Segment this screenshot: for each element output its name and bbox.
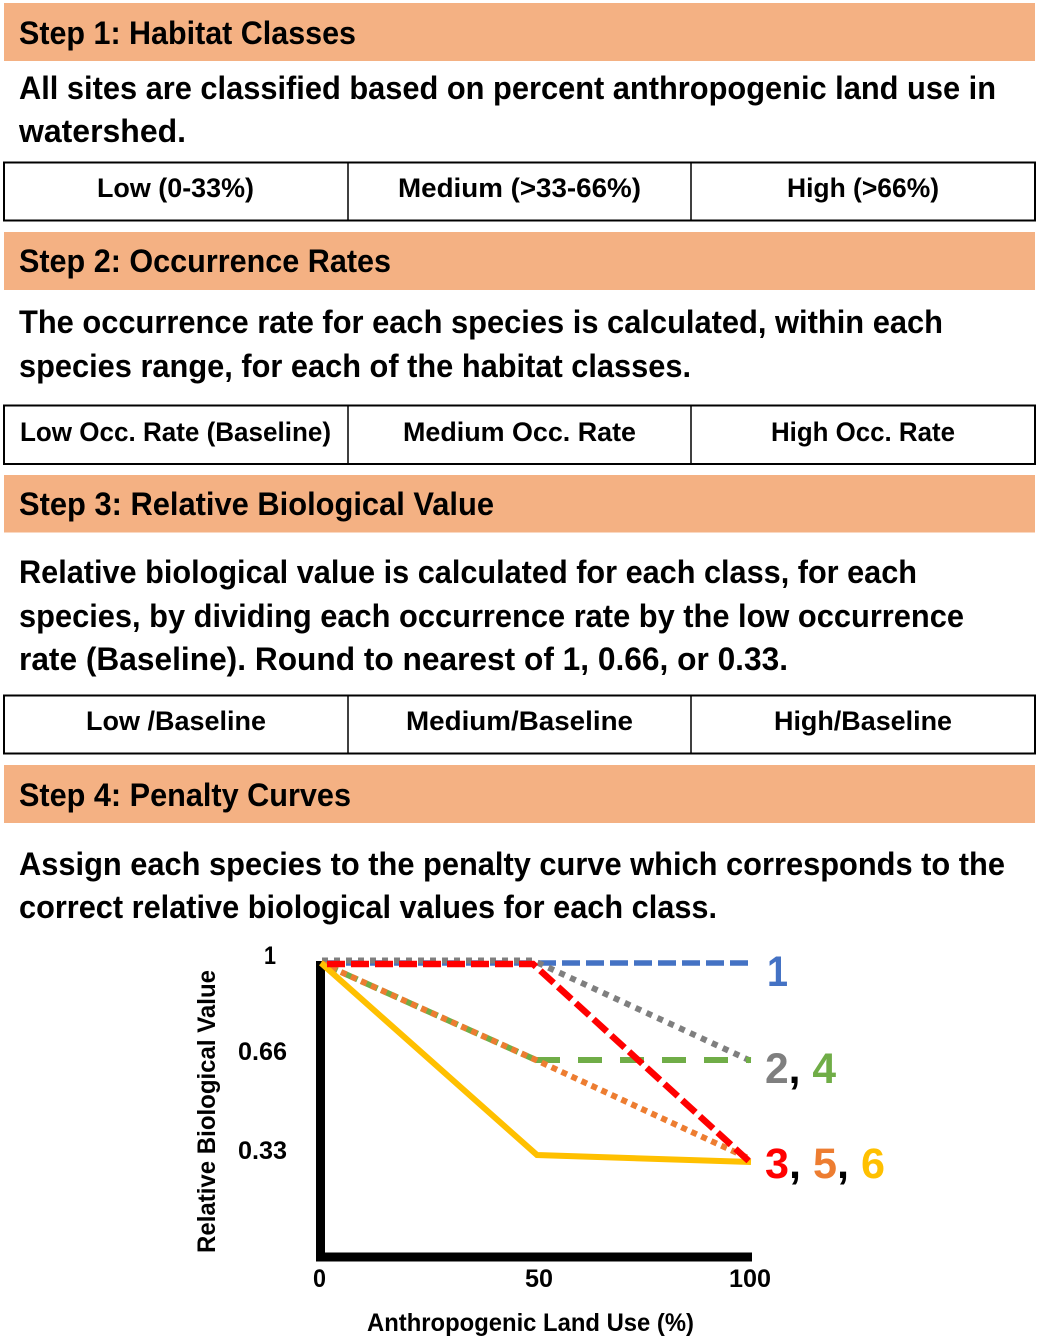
text block: step 3 description bbox=[19, 554, 964, 677]
table: occurrence rates bbox=[4, 405, 1035, 464]
y axis tick labels: 1 bbox=[264, 942, 276, 970]
curve label: 1: 1 bbox=[767, 948, 788, 996]
text block: step 3 description: rate (Baseline). Round to nearest of 1, 0.66, or 0.33. bbox=[19, 641, 788, 677]
y axis tick labels: 0.66 bbox=[238, 1038, 287, 1066]
x axis tick labels: 0 bbox=[313, 1265, 326, 1293]
table: habitat classes: High (>66%) bbox=[787, 173, 939, 203]
table: habitat classes: Low (0-33%) bbox=[97, 173, 254, 203]
y axis title: Relative Biological Value bbox=[193, 970, 221, 1253]
table: habitat classes bbox=[4, 162, 1035, 221]
text block: step 2 description: species range, for each of the habitat classes. bbox=[19, 348, 691, 384]
x axis title: Anthropogenic Land Use (%) bbox=[367, 1309, 694, 1337]
panel: step 2 header bbox=[4, 232, 1035, 290]
panel: step 3 header bbox=[4, 475, 1035, 532]
text block: step 3 description: Relative biological value is calculated for each class, for each bbox=[19, 554, 917, 590]
curve labels: 3, 5, 6: 3, 5, 6 bbox=[765, 1140, 885, 1188]
curve 1: blue dashed bbox=[322, 960, 751, 966]
table: relative biological value bbox=[4, 695, 1035, 754]
curve 6: yellow solid bbox=[321, 963, 751, 1162]
table: relative biological value: Low /Baseline bbox=[86, 706, 266, 736]
table: relative biological value: High/Baseline bbox=[774, 706, 952, 736]
y axis tick labels bbox=[238, 942, 287, 1165]
text block: step 4 description: correct relative biological values for each class. bbox=[19, 889, 717, 925]
text block: step 2 description: The occurrence rate for each species is calculated, within each bbox=[19, 304, 943, 340]
text block: step 3 description: species, by dividing each occurrence rate by the low occurrence bbox=[19, 598, 964, 634]
curve 4: green dashed bbox=[321, 963, 536, 1060]
heading: step 2: Step 2: Occurrence Rates bbox=[19, 243, 391, 279]
text block: step 1 description: watershed. bbox=[18, 113, 186, 149]
y axis tick labels: 0.33 bbox=[238, 1137, 287, 1165]
curve 3: red dashed bbox=[327, 964, 751, 1163]
text block: step 1 description bbox=[18, 70, 996, 149]
x axis tick labels bbox=[313, 1265, 771, 1293]
heading: step 3: Step 3: Relative Biological Value bbox=[19, 486, 494, 522]
text block: step 4 description bbox=[19, 846, 1005, 925]
curve 5: orange dotted bbox=[321, 963, 748, 1158]
chart: penalty curves bbox=[193, 942, 885, 1337]
panel: step 1 header bbox=[4, 3, 1035, 61]
table: occurrence rates: Low Occ. Rate (Baseline) bbox=[20, 417, 331, 447]
table: habitat classes: Medium (>33-66%) bbox=[398, 173, 641, 203]
curve 2: gray dotted bbox=[322, 960, 751, 1061]
x axis tick labels: 100 bbox=[729, 1265, 771, 1293]
axes bbox=[320, 961, 752, 1257]
heading: step 1: Step 1: Habitat Classes bbox=[19, 15, 356, 51]
panel: step 4 header bbox=[4, 765, 1035, 823]
x axis tick labels: 50 bbox=[525, 1265, 553, 1293]
table: occurrence rates: Medium Occ. Rate bbox=[403, 417, 636, 447]
table: occurrence rates: High Occ. Rate bbox=[771, 417, 955, 447]
text block: step 4 description: Assign each species to the penalty curve which corresponds to the bbox=[19, 846, 1005, 882]
text block: step 2 description bbox=[19, 304, 943, 384]
curve labels: 2, 4: 2, 4 bbox=[765, 1045, 836, 1093]
table: relative biological value: Medium/Baseline bbox=[406, 706, 633, 736]
heading: step 4: Step 4: Penalty Curves bbox=[19, 777, 351, 813]
text block: step 1 description: All sites are classified based on percent anthropogenic land use in bbox=[19, 70, 996, 106]
